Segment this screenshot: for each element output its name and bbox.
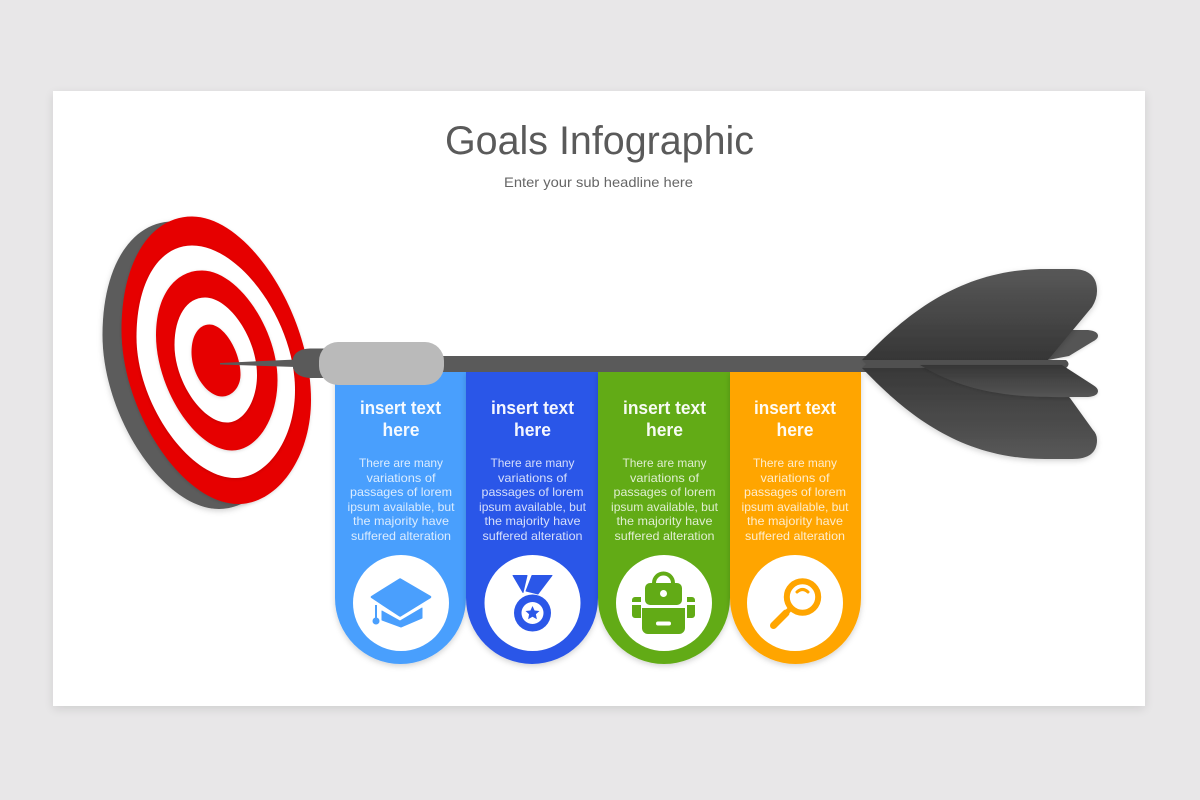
column heading: here xyxy=(382,420,420,440)
column heading: here xyxy=(646,420,683,440)
column body text: There are many xyxy=(490,456,574,470)
title: Goals Infographic xyxy=(445,119,754,163)
column body text: passages of lorem xyxy=(614,485,716,499)
column: green xyxy=(598,372,730,664)
column body text xyxy=(611,456,719,543)
column: dark blue xyxy=(466,372,598,664)
column body text: variations of xyxy=(366,471,436,485)
column body text: suffered alteration xyxy=(351,529,451,543)
icon: backpack xyxy=(616,555,712,651)
column body text: passages of lorem xyxy=(350,485,452,499)
column body text: ipsum available, but xyxy=(348,500,455,514)
column body text: suffered alteration xyxy=(482,529,582,543)
column body text: ipsum available, but xyxy=(742,500,849,514)
column body text: There are many xyxy=(753,456,837,470)
column body text: the majority have xyxy=(353,514,449,528)
column body text: There are many xyxy=(622,456,706,470)
column body text: passages of lorem xyxy=(482,485,584,499)
column heading: insert text xyxy=(491,398,574,418)
column heading: here xyxy=(776,420,814,440)
column body text: suffered alteration xyxy=(614,529,714,543)
column body text: suffered alteration xyxy=(745,529,845,543)
column: orange xyxy=(730,372,861,664)
column heading xyxy=(491,398,574,440)
column body text: the majority have xyxy=(616,514,713,528)
icon: medal xyxy=(484,555,580,651)
dart flight: top xyxy=(862,269,1097,360)
column body text xyxy=(348,456,455,543)
column body text: variations of xyxy=(760,471,830,485)
column heading: here xyxy=(514,420,551,440)
column body text: variations of xyxy=(630,471,700,485)
column heading xyxy=(360,398,441,440)
dart flight: back small xyxy=(1048,330,1098,360)
column body text: ipsum available, but xyxy=(479,500,587,514)
dart flight: front small xyxy=(920,365,1098,397)
column: blue xyxy=(335,372,466,664)
panel: slide xyxy=(53,91,1145,706)
column body text: variations of xyxy=(498,471,568,485)
column body text xyxy=(742,456,849,543)
column heading: insert text xyxy=(360,398,441,418)
dart barrel xyxy=(319,342,444,385)
column heading: insert text xyxy=(754,398,836,418)
column body text: ipsum available, but xyxy=(611,500,719,514)
dart xyxy=(220,269,1098,459)
subtitle: Enter your sub headline here xyxy=(504,174,693,190)
icon: target board xyxy=(102,216,311,509)
column body text: the majority have xyxy=(484,514,581,528)
dart needle xyxy=(220,360,296,367)
dart shaft xyxy=(440,356,866,372)
dart shaft inside flights xyxy=(862,360,1068,368)
column heading xyxy=(623,398,706,440)
column body text: the majority have xyxy=(747,514,843,528)
column heading: insert text xyxy=(623,398,706,418)
dart hub xyxy=(293,348,330,378)
dart flight: bottom xyxy=(862,368,1097,459)
column body text: There are many xyxy=(359,456,443,470)
icon: graduation cap xyxy=(353,555,449,651)
column heading xyxy=(754,398,836,440)
column body text: passages of lorem xyxy=(744,485,846,499)
column body text xyxy=(479,456,587,543)
icon: magnifying glass xyxy=(747,555,843,651)
